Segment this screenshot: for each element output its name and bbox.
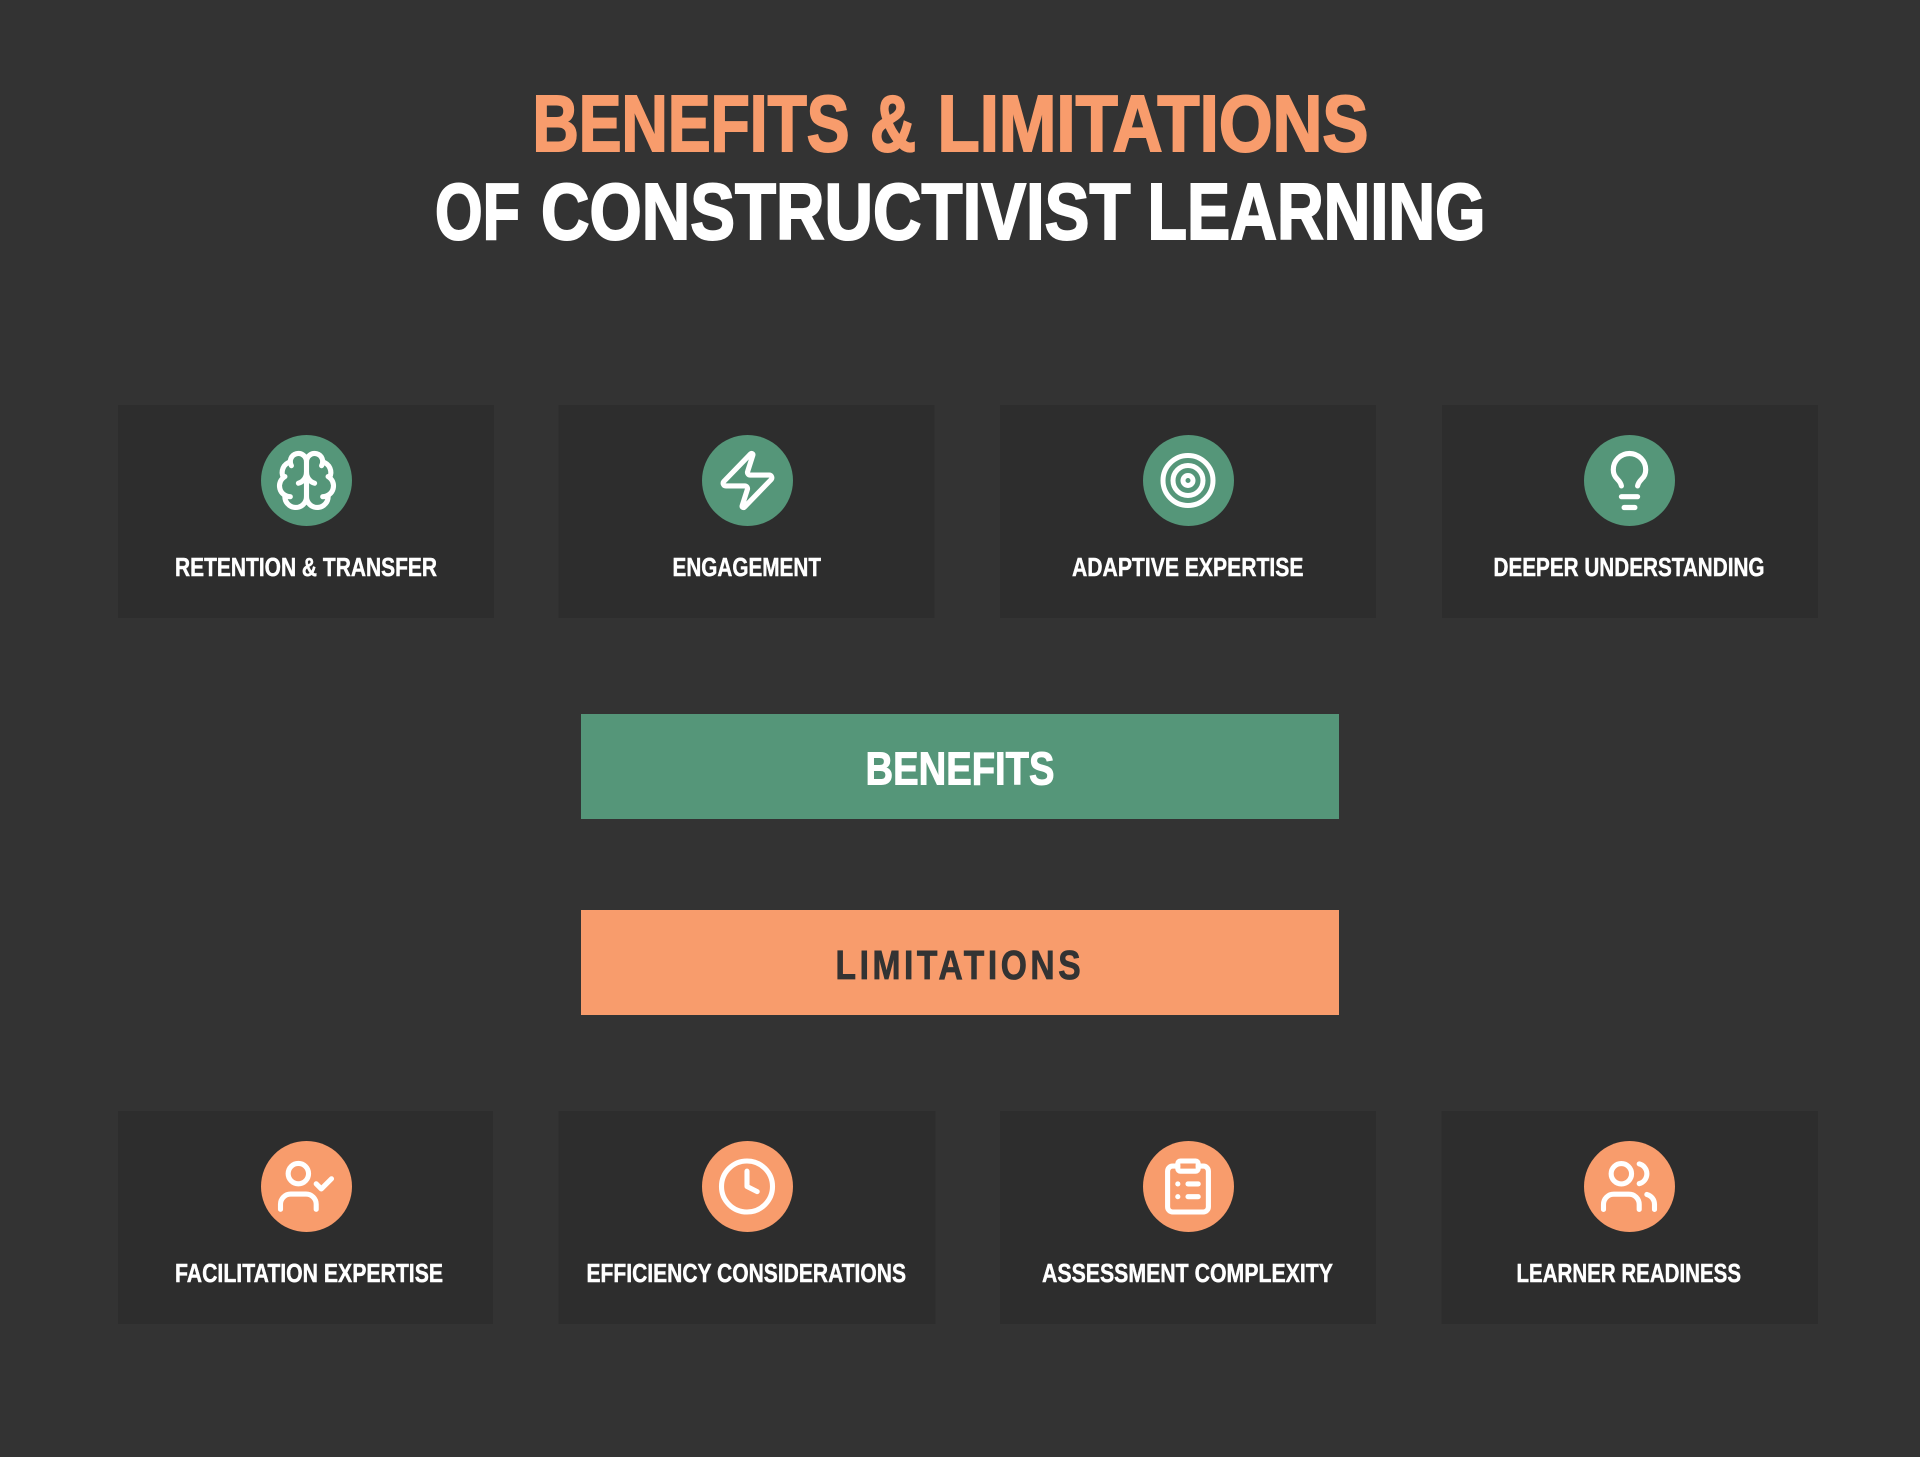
card: efficiency considerations: EFFICIENCY CONSIDERATIONS: [586, 1260, 906, 1288]
icon: user check: [280, 1163, 332, 1209]
icon: lightning bolt: [723, 453, 772, 508]
title line 2: CONSTRUCTIVIST: [541, 167, 1130, 256]
card: efficiency considerations: [558, 1111, 936, 1324]
panel: benefit cards: [118, 405, 1818, 618]
card: facilitation expertise: FACILITATION EXPERTISE: [175, 1260, 443, 1288]
card: engagement: ENGAGEMENT: [672, 554, 821, 582]
title line 1: &: [870, 79, 916, 168]
card: adaptive expertise: [1000, 405, 1376, 618]
title line 2: [435, 167, 1486, 256]
title line 2: LEARNING: [1148, 167, 1486, 256]
card: deeper understanding: [1442, 405, 1818, 618]
title line 2: OF: [435, 167, 520, 256]
card: facilitation expertise: [118, 1111, 493, 1324]
card: adaptive expertise: ADAPTIVE EXPERTISE: [1072, 554, 1304, 582]
icon: brain: [280, 453, 333, 507]
title line 1: BENEFITS: [532, 79, 850, 168]
card: retention & transfer: RETENTION & TRANSFER: [175, 554, 437, 582]
title line 1: LIMITATIONS: [938, 79, 1368, 168]
card: assessment complexity: ASSESSMENT COMPLEXITY: [1042, 1260, 1333, 1288]
banner: limitations: [581, 910, 1339, 1015]
card: learner readiness: [1442, 1111, 1818, 1324]
title line 1: [532, 79, 1368, 168]
icon: target: [1163, 456, 1213, 506]
panel: limitation cards: [118, 1111, 1818, 1324]
icon: users: [1604, 1164, 1654, 1209]
icon: lightbulb: [1613, 454, 1646, 508]
icon: clipboard list: [1168, 1161, 1208, 1212]
card: engagement: [558, 405, 934, 618]
card: deeper understanding: DEEPER UNDERSTANDING: [1494, 554, 1764, 582]
card: retention & transfer: [118, 405, 494, 618]
banner: benefits: BENEFITS: [866, 742, 1054, 794]
icon: clock: [722, 1161, 772, 1212]
banner: benefits: [581, 714, 1339, 819]
card: learner readiness: LEARNER READINESS: [1516, 1260, 1741, 1288]
banner: limitations: LIMITATIONS: [836, 942, 1081, 988]
card: assessment complexity: [1000, 1111, 1376, 1324]
title: [435, 79, 1486, 256]
